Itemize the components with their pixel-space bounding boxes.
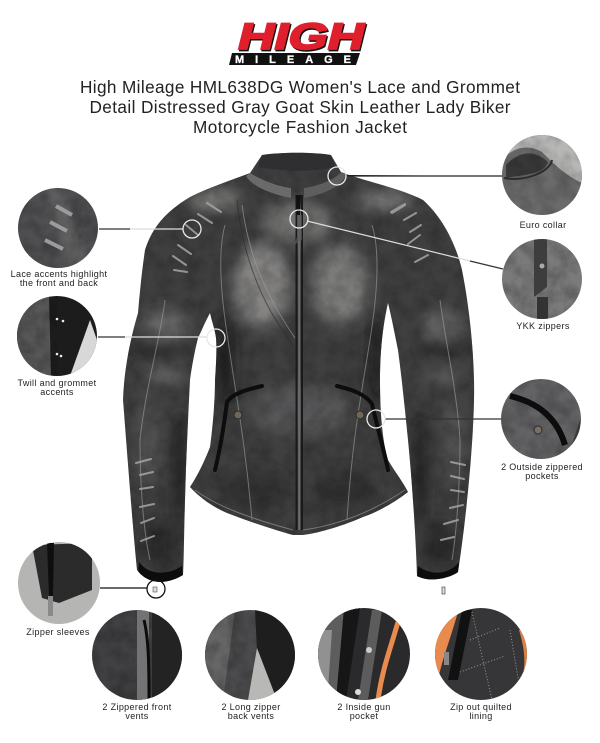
zipper pull on cuff — [442, 587, 445, 594]
pocket zippers — [215, 386, 388, 470]
lace accents — [136, 203, 465, 541]
jacket illustration — [120, 145, 480, 595]
callout: YKK zippers — [290, 210, 582, 331]
logo: High Mileage — [229, 16, 372, 66]
callout: outside zippered pockets: 2 Outside zippered — [501, 462, 583, 472]
callout: front vents: vents — [125, 711, 149, 721]
callout: gun pocket: 2 Inside gun — [337, 702, 391, 712]
callout: twill and grommet — [17, 296, 225, 397]
center zipper — [294, 195, 302, 530]
callout: zipper sleeves: Zipper sleeves — [26, 627, 90, 637]
callout: euro collar — [328, 135, 582, 230]
callout: back vents: back vents — [228, 711, 274, 721]
callout: quilted lining: Zip out quilted — [450, 702, 512, 712]
callout: quilted lining — [432, 608, 530, 721]
callout: outside zippered pockets — [367, 379, 583, 481]
callout: gun pocket — [318, 608, 410, 721]
callout: gun pocket: pocket — [350, 711, 378, 721]
callout: zipper sleeves — [18, 542, 165, 637]
photo: long zipper back vents — [205, 610, 295, 700]
photo: zipper sleeves — [18, 542, 100, 624]
callout: lace accents — [11, 188, 201, 288]
callout: front vents — [92, 610, 182, 721]
callout: quilted lining: lining — [469, 711, 493, 721]
title: High Mileage HML638DG Women's Lace and Grommet — [80, 77, 520, 97]
photo: twill and grommet — [17, 296, 97, 376]
callout: front vents: 2 Zippered front — [102, 702, 172, 712]
callout: lace accents: the front and back — [20, 278, 98, 288]
logo: High Mileage: MILEAGE — [235, 54, 351, 66]
photo: outside zippered pockets — [501, 379, 581, 460]
callout: euro collar: Euro collar — [520, 220, 566, 230]
callout: back vents — [205, 610, 295, 721]
photo: euro collar — [502, 135, 582, 215]
callout: twill and grommet: accents — [40, 387, 74, 397]
callout: outside zippered pockets: pockets — [525, 471, 559, 481]
title: Detail Distressed Gray Goat Skin Leather Lady Biker — [90, 97, 511, 117]
title: Motorcycle Fashion Jacket — [193, 117, 407, 137]
logo: High Mileage: HIGH — [234, 16, 370, 57]
title — [80, 77, 520, 137]
callout: twill and grommet: Twill and grommet — [18, 378, 97, 388]
photo: inside gun pocket — [318, 608, 410, 700]
photo: YKK zippers — [502, 239, 582, 319]
photo: zip out quilted lining — [432, 608, 530, 700]
pocket snaps — [234, 411, 364, 419]
photo: zippered front vents — [92, 610, 182, 700]
callout: lace accents: Lace accents highlight — [11, 269, 108, 279]
callout: YKK zippers: YKK zippers — [516, 321, 570, 331]
photo: lace accents — [18, 188, 98, 268]
callout: back vents: 2 Long zipper — [221, 702, 281, 712]
logo: High Mileage: HIGH — [235, 17, 371, 58]
